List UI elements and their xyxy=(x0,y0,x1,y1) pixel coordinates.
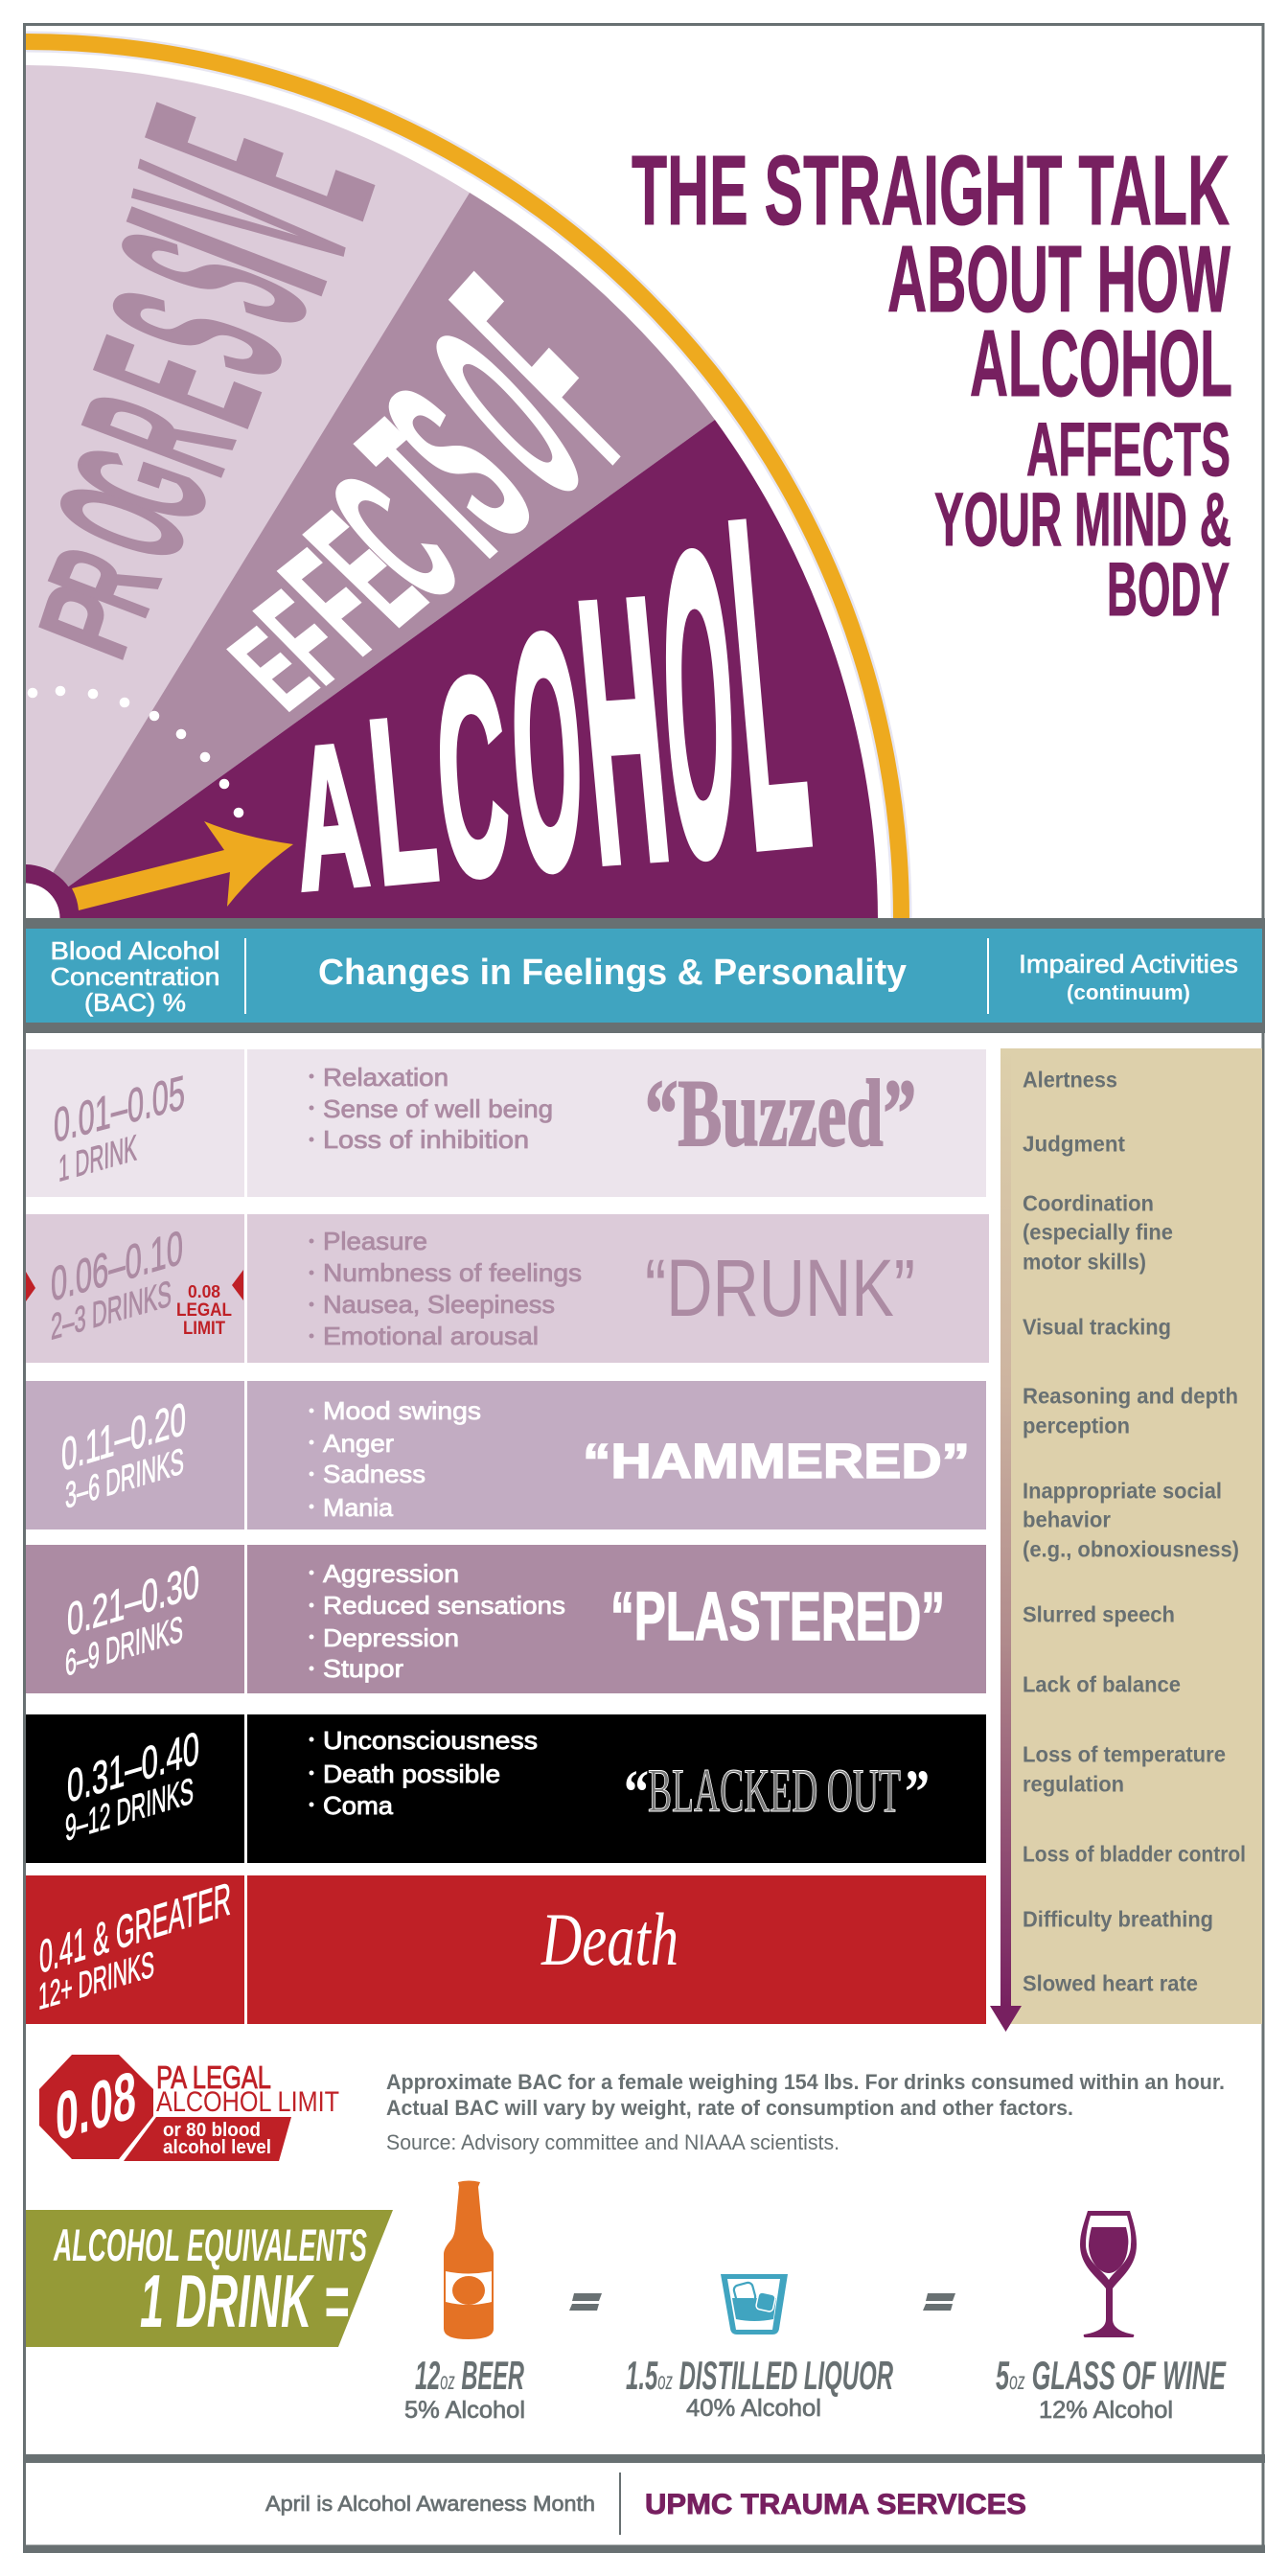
panel: impaired activities: Difficulty breathing xyxy=(1023,1907,1213,1932)
header: impaired: (continuum) xyxy=(1067,980,1190,1004)
footer xyxy=(23,2454,1265,2553)
label: blacked out: “ xyxy=(624,1758,649,1828)
row: buzzed: Relaxation xyxy=(323,1063,448,1092)
wheel word: ALCOHOL: A xyxy=(286,702,375,933)
wheel word: EFFECTS OF: F xyxy=(249,521,421,685)
header: BAC: (BAC) % xyxy=(84,988,186,1017)
gold arrow xyxy=(72,821,293,910)
row: hammered: 0.11–0.20 xyxy=(61,1393,186,1482)
row: hammered: Sadness xyxy=(323,1460,426,1488)
panel: impaired activities: Judgment xyxy=(1023,1131,1125,1156)
wheel word: PROGRESSIVE: G xyxy=(36,426,247,541)
row: plastered: Aggression xyxy=(323,1559,459,1588)
drink label: beer xyxy=(404,2353,525,2424)
wheel word: EFFECTS OF: C xyxy=(290,438,499,639)
legal limit stop sign xyxy=(39,2055,339,2161)
row: blacked out: Death possible xyxy=(323,1760,500,1788)
panel: impaired activities: Loss of temperature xyxy=(1023,1742,1226,1767)
wheel word: EFFECTS OF: F xyxy=(397,220,687,517)
legal limit stop sign: PA LEGAL xyxy=(156,2059,271,2095)
wheel word: EFFECTS OF: E xyxy=(270,479,460,658)
header: impaired xyxy=(1019,950,1238,1004)
row: blacked out xyxy=(26,1714,986,1863)
wheel word: ALCOHOL: O xyxy=(654,465,745,943)
panel: impaired activities: Reasoning and depth xyxy=(1023,1384,1238,1409)
panel: impaired activities: Visual tracking xyxy=(1023,1315,1171,1340)
note text: Source: Advisory committee and NIAAA scientists. xyxy=(386,2130,840,2154)
footer: April is Alcohol Awareness Month xyxy=(265,2492,595,2516)
header: BAC: Blood Alcohol xyxy=(50,936,220,965)
gold outer arc xyxy=(26,31,912,918)
row: buzzed: Loss of inhibition xyxy=(323,1125,529,1154)
label: drunk: “DRUNK” xyxy=(645,1243,915,1333)
panel: impaired activities xyxy=(990,1048,1262,2032)
header: BAC: Concentration xyxy=(50,962,220,991)
label: buzzed: “Buzzed” xyxy=(645,1060,916,1166)
panel: impaired activities: motor skills) xyxy=(1023,1250,1146,1275)
header: changes: Changes in Feelings & Personality xyxy=(318,953,907,993)
panel: impaired activities: Alertness xyxy=(1023,1068,1117,1092)
row: drunk: Numbness of feelings xyxy=(323,1258,582,1287)
panel: impaired activities: Inappropriate social xyxy=(1023,1478,1222,1503)
alcohol equivalents banner: ALCOHOL EQUIVALENTS xyxy=(53,2220,367,2270)
label: blacked out: BLACKED OUT xyxy=(648,1757,901,1826)
drink label: beer: 12oz BEER xyxy=(415,2353,524,2398)
legal limit marker: LEGAL xyxy=(176,1300,232,1321)
drink label: liquor: 40% Alcohol xyxy=(686,2395,821,2422)
drink label: beer: 5% Alcohol xyxy=(404,2397,525,2424)
row: drunk xyxy=(26,1214,989,1363)
wheel word: PROGRESSIVE: P xyxy=(12,567,165,675)
wheel word: EFFECTS OF: O xyxy=(382,280,632,546)
wheel word: PROGRESSIVE xyxy=(12,74,439,675)
row: plastered: 6–9 DRINKS xyxy=(65,1609,183,1685)
panel: impaired activities: Slowed heart rate xyxy=(1023,1970,1198,1995)
wheel word: EFFECTS OF: S xyxy=(339,342,579,584)
equals sign xyxy=(569,2293,602,2311)
dotted arc xyxy=(28,686,243,817)
wheel word: ALCOHOL: H xyxy=(566,522,681,940)
row: death: 0.41 & GREATER xyxy=(39,1874,231,1984)
row: drunk: Pleasure xyxy=(323,1227,427,1255)
row: hammered xyxy=(26,1381,986,1530)
legal limit stop sign: 0.08 xyxy=(56,2057,136,2156)
row: drunk: Emotional arousal xyxy=(323,1322,539,1350)
row: blacked out: Coma xyxy=(323,1791,394,1820)
panel: impaired activities: (especially fine xyxy=(1023,1219,1173,1244)
wheel word: ALCOHOL: L xyxy=(715,424,822,944)
label: death: Death xyxy=(540,1898,678,1981)
wheel word: PROGRESSIVE: S xyxy=(59,264,334,403)
row: buzzed: 1 DRINK xyxy=(58,1128,137,1190)
note text: Actual BAC will vary by weight, rate of consumption and other factors. xyxy=(386,2096,1073,2120)
wheel word: PROGRESSIVE: S xyxy=(63,202,363,355)
wheel word: ALCOHOL: C xyxy=(428,618,517,936)
panel: impaired activities: Slurred speech xyxy=(1023,1602,1175,1627)
icon: wine glass xyxy=(1080,2211,1137,2337)
row: plastered: Reduced sensations xyxy=(323,1591,565,1620)
row: blacked out: 9–12 DRINKS xyxy=(65,1771,194,1850)
wheel word: PROGRESSIVE: R xyxy=(17,529,192,633)
wheel word: EFFECTS OF: F xyxy=(227,565,378,710)
row: hammered: 3–6 DRINKS xyxy=(65,1441,184,1517)
row: hammered: Anger xyxy=(323,1429,394,1458)
wedge: effects of xyxy=(25,193,715,918)
panel: impaired activities: behavior xyxy=(1023,1506,1111,1531)
wheel word: EFFECTS OF: T xyxy=(315,379,546,606)
wheel word: ALCOHOL: O xyxy=(503,565,591,940)
row: plastered xyxy=(26,1545,986,1693)
radial wheel xyxy=(26,31,912,918)
wedge: progressive xyxy=(25,65,470,918)
legal limit marker: LIMIT xyxy=(183,1319,225,1339)
label: blacked out: ” xyxy=(905,1758,930,1828)
wedge: alcohol xyxy=(25,420,878,918)
legal limit stop sign: alcohol level xyxy=(163,2137,271,2158)
row: hammered: Mood swings xyxy=(323,1396,481,1425)
row: death: 12+ DRINKS xyxy=(38,1944,154,2018)
icon: liquor glass xyxy=(721,2274,788,2334)
header: impaired: Impaired Activities xyxy=(1019,950,1238,978)
label: blacked out xyxy=(624,1757,930,1828)
panel: impaired activities: Lack of balance xyxy=(1023,1671,1181,1696)
icon: beer bottle xyxy=(444,2181,494,2339)
row: drunk: Nausea, Sleepiness xyxy=(323,1290,555,1319)
row: death xyxy=(26,1874,986,2024)
alcohol equivalents banner: 1 DRINK = xyxy=(140,2259,349,2343)
panel: impaired activities: (e.g., obnoxiousness) xyxy=(1023,1537,1239,1562)
drink label: wine xyxy=(996,2353,1227,2424)
panel: impaired activities: Loss of bladder control xyxy=(1023,1842,1246,1867)
row: blacked out: Unconsciousness xyxy=(323,1726,538,1755)
label: hammered: “HAMMERED” xyxy=(583,1434,970,1488)
wheel word: PROGRESSIVE: V xyxy=(71,137,410,293)
note text xyxy=(386,2070,1225,2154)
alcohol equivalents banner xyxy=(26,2210,393,2347)
panel: impaired activities: perception xyxy=(1023,1413,1130,1438)
panel: impaired activities: Coordination xyxy=(1023,1190,1154,1215)
row: plastered: 0.21–0.30 xyxy=(67,1556,199,1646)
footer: UPMC TRAUMA SERVICES xyxy=(645,2489,1026,2520)
drink label: wine: 12% Alcohol xyxy=(1039,2397,1173,2424)
note text: Approximate BAC for a female weighing 154 lbs. For drinks consumed within an hour. xyxy=(386,2070,1225,2094)
wheel word: PROGRESSIVE: I xyxy=(67,179,387,324)
panel: impaired activities: regulation xyxy=(1023,1771,1124,1796)
legal limit marker: 0.08 xyxy=(188,1282,220,1301)
drink label: liquor xyxy=(626,2353,893,2422)
wheel word: PROGRESSIVE: E xyxy=(47,313,309,450)
row: drunk: 0.06–0.10 xyxy=(51,1220,183,1312)
row: buzzed: Sense of well being xyxy=(323,1094,553,1123)
row: plastered: Depression xyxy=(323,1623,459,1652)
row: buzzed xyxy=(26,1049,986,1197)
header band xyxy=(23,918,1265,1033)
label: plastered: “PLASTERED” xyxy=(610,1579,945,1655)
legal limit stop sign: ALCOHOL LIMIT xyxy=(156,2086,339,2118)
legal limit stop sign: or 80 blood xyxy=(163,2120,261,2141)
wheel word: ALCOHOL: L xyxy=(360,667,446,932)
row: buzzed: 0.01–0.05 xyxy=(54,1065,185,1153)
row: plastered: Stupor xyxy=(323,1654,403,1683)
header: BAC xyxy=(50,936,220,1017)
row: blacked out: 0.31–0.40 xyxy=(67,1723,199,1813)
equals sign xyxy=(923,2293,955,2311)
wheel word: EFFECTS OF xyxy=(205,220,687,733)
wheel word: ALCOHOL xyxy=(286,424,822,944)
hub xyxy=(26,864,69,918)
wheel word: PROGRESSIVE: O xyxy=(19,463,224,582)
wheel word: PROGRESSIVE: E xyxy=(80,74,439,250)
wheel word: PROGRESSIVE: R xyxy=(38,371,278,496)
row: drunk: 2–3 DRINKS xyxy=(51,1274,172,1348)
row: hammered: Mania xyxy=(323,1493,394,1522)
title xyxy=(632,135,1232,632)
legal limit marker xyxy=(26,1270,243,1339)
continuum arrow xyxy=(990,1048,1022,2032)
drink label: liquor: 1.5oz DISTILLED LIQUOR xyxy=(626,2353,893,2399)
wheel word: EFFECTS OF: E xyxy=(205,606,341,733)
